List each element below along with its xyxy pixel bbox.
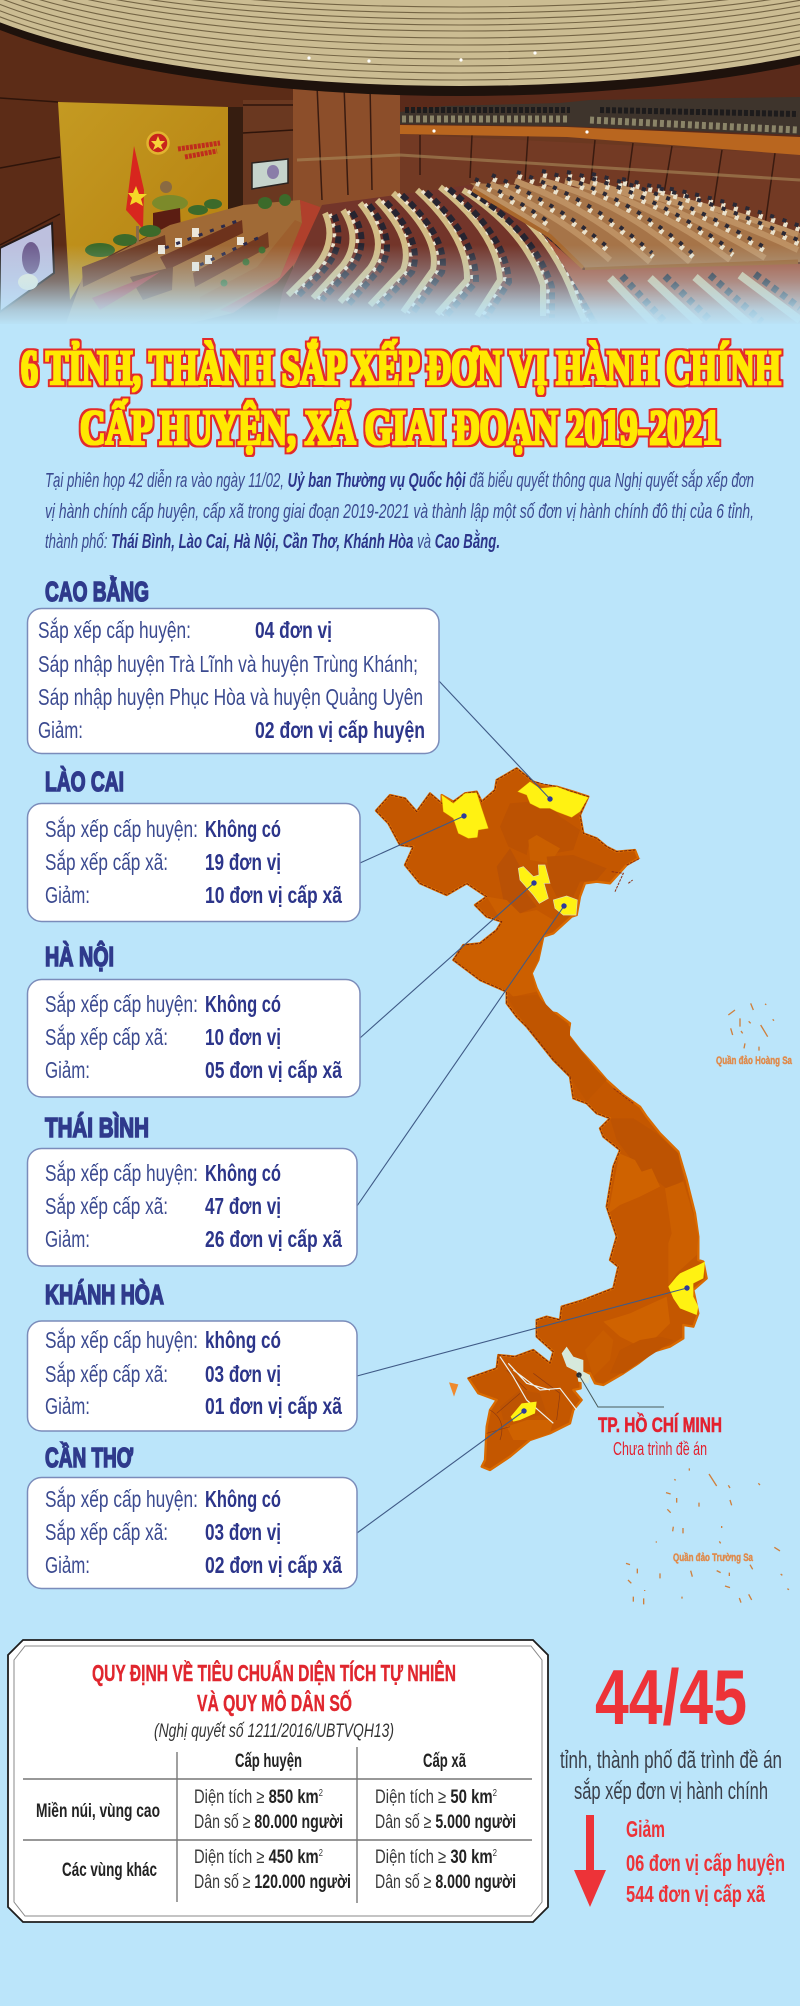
callout: Ho Chi Minh City bbox=[576, 1372, 722, 1459]
panel: Cao Bang: Sắp xếp cấp huyện: bbox=[38, 617, 191, 643]
big number 44/45: 44/45 bbox=[595, 1653, 747, 1741]
callout: Ho Chi Minh City: Chưa trình đề án bbox=[613, 1439, 707, 1459]
row: mountainous regions bbox=[36, 1787, 516, 1833]
map outline bbox=[376, 768, 707, 1470]
yellow province: Thai Binh bbox=[553, 896, 577, 915]
panel: Ha Noi: 05 đơn vị cấp xã bbox=[205, 1057, 342, 1083]
title bbox=[21, 338, 781, 455]
yellow province: Can Tho bbox=[511, 1402, 537, 1422]
panel: Thai Binh bbox=[28, 1112, 357, 1266]
row: other regions: Dân số ≥ 120.000 người bbox=[194, 1872, 351, 1893]
panel: criteria table bbox=[8, 1640, 548, 1922]
map of Vietnam bbox=[376, 768, 793, 1604]
row: mountainous regions: Diện tích ≥ 850 km bbox=[194, 1787, 333, 1808]
yellow province: Cao Bang bbox=[518, 782, 588, 817]
panel: Lao Cai: 10 đơn vị cấp xã bbox=[205, 882, 342, 908]
panel: Ha Noi: Sắp xếp cấp xã: bbox=[45, 1024, 168, 1050]
panel: Can Tho: Giảm: bbox=[45, 1552, 90, 1578]
panel: Can Tho: CẦN THƠ bbox=[45, 1442, 133, 1473]
screens bbox=[0, 159, 288, 312]
panel: Khanh Hoa bbox=[28, 1279, 357, 1431]
ceiling bbox=[0, 0, 800, 96]
panel: Cao Bang bbox=[28, 576, 439, 754]
islands: Hoang Sa bbox=[728, 1003, 774, 1051]
islands: Truong Sa bbox=[626, 1468, 789, 1604]
table heading: QUY ĐỊNH VỀ TIÊU CHUẨN DIỆN TÍCH TỰ NHIÊN bbox=[92, 1659, 456, 1686]
border dashes bbox=[376, 768, 635, 1378]
yellow province: Lao Cai bbox=[442, 793, 488, 838]
panel: Thai Binh: Sắp xếp cấp huyện: bbox=[45, 1160, 198, 1186]
panel: Thai Binh: Không có bbox=[205, 1160, 281, 1186]
panel: Ha Noi: Sắp xếp cấp huyện: bbox=[45, 991, 198, 1017]
panel: Cao Bang: CAO BẰNG bbox=[45, 576, 149, 607]
panel: Thai Binh: THÁI BÌNH bbox=[45, 1112, 149, 1143]
panel: Thai Binh: 47 đơn vị bbox=[205, 1193, 281, 1219]
row: other regions: Diện tích ≥ 30 km bbox=[375, 1847, 504, 1868]
province shading bbox=[453, 790, 698, 1440]
intro paragraph: thành phố: Thái Bình, Lào Cai, Hà Nội, Cần Thơ, Khánh Hòa và Cao Bằng. bbox=[45, 530, 500, 553]
panel: Khanh Hoa: KHÁNH HÒA bbox=[45, 1279, 164, 1310]
header photo: National Assembly hall bbox=[0, 0, 800, 330]
delegate seating: right block bbox=[470, 171, 800, 326]
panel: Can Tho: 02 đơn vị cấp xã bbox=[205, 1552, 342, 1578]
row: mountainous regions: 2 bbox=[319, 1788, 323, 1799]
yellow province: Khanh Hoa bbox=[668, 1262, 705, 1315]
northern islets bbox=[612, 858, 640, 1103]
row: other regions: Diện tích ≥ 450 km bbox=[194, 1847, 333, 1868]
callout: Ho Chi Minh City: TP. HỒ CHÍ MINH bbox=[598, 1413, 722, 1437]
panel: Khanh Hoa: 01 đơn vị cấp xã bbox=[205, 1393, 342, 1419]
Phu Quoc island bbox=[449, 1382, 458, 1397]
reduction text: Giảm bbox=[626, 1816, 665, 1842]
panel: Cao Bang: 04 đơn vị bbox=[255, 617, 332, 643]
panel: Lao Cai: Sắp xếp cấp xã: bbox=[45, 849, 168, 875]
panel: Lao Cai: 19 đơn vị bbox=[205, 849, 281, 875]
table heading bbox=[92, 1659, 456, 1742]
panel: Can Tho: Sắp xếp cấp xã: bbox=[45, 1519, 168, 1545]
yellow stage wall with emblem and flag bbox=[58, 102, 243, 300]
panel: Ha Noi: Giảm: bbox=[45, 1057, 90, 1083]
table heading: (Nghị quyết số 1211/2016/UBTVQH13) bbox=[154, 1721, 394, 1742]
panel: Ha Noi: 10 đơn vị bbox=[205, 1024, 281, 1050]
yellow province: Ha Noi bbox=[518, 865, 550, 903]
presidium desks and floor bbox=[70, 194, 320, 313]
big number caption bbox=[560, 1747, 782, 1805]
panel: Thai Binh: Sắp xếp cấp xã: bbox=[45, 1193, 168, 1219]
panel: Thai Binh: Giảm: bbox=[45, 1226, 90, 1252]
panel: Cao Bang: Sáp nhập huyện Phục Hòa và huyện Quảng Uyên bbox=[38, 684, 423, 710]
table headers bbox=[235, 1751, 466, 1772]
table grid bbox=[23, 1747, 532, 1903]
intro paragraph bbox=[45, 469, 754, 553]
panel: Cao Bang: 02 đơn vị cấp huyện bbox=[255, 717, 425, 743]
delegate seating: centre fan bbox=[275, 185, 594, 326]
panel: Lao Cai bbox=[28, 766, 360, 922]
row: mountainous regions: Dân số ≥ 5.000 người bbox=[375, 1812, 516, 1833]
row: mountainous regions: Diện tích ≥ 50 km bbox=[375, 1787, 504, 1808]
panel: Can Tho: Sắp xếp cấp huyện: bbox=[45, 1486, 198, 1512]
panel: Lao Cai: LÀO CAI bbox=[45, 766, 124, 797]
panel: Can Tho: Không có bbox=[205, 1486, 281, 1512]
panel: Khanh Hoa: Giảm: bbox=[45, 1393, 90, 1419]
row: other regions: 2 bbox=[493, 1848, 497, 1859]
row: mountainous regions: 2 bbox=[493, 1788, 497, 1799]
row: mountainous regions: Dân số ≥ 80.000 người bbox=[194, 1812, 343, 1833]
row: other regions: 2 bbox=[319, 1848, 323, 1859]
panel: Lao Cai: Sắp xếp cấp huyện: bbox=[45, 816, 198, 842]
panel: Lao Cai: Không có bbox=[205, 816, 281, 842]
table headers: Cấp huyện bbox=[235, 1751, 302, 1772]
panel: Can Tho bbox=[28, 1442, 357, 1588]
panel: Cao Bang: Giảm: bbox=[38, 717, 83, 743]
panel: Cao Bang: Sáp nhập huyện Trà Lĩnh và huyện Trùng Khánh; bbox=[38, 651, 418, 677]
panel: Ha Noi bbox=[28, 940, 360, 1097]
panel: Lao Cai: Giảm: bbox=[45, 882, 90, 908]
photo fade to background bbox=[0, 245, 800, 326]
panel: Thai Binh: 26 đơn vị cấp xã bbox=[205, 1226, 342, 1252]
panel: Ha Noi: Không có bbox=[205, 991, 281, 1017]
row: other regions: Các vùng khác bbox=[62, 1860, 157, 1881]
panel: Ha Noi: HÀ NỘI bbox=[45, 940, 114, 972]
row: other regions: Dân số ≥ 8.000 người bbox=[375, 1872, 516, 1893]
panel: Khanh Hoa: không có bbox=[205, 1327, 281, 1353]
row: other regions bbox=[62, 1847, 516, 1893]
mekong rivers bbox=[500, 1357, 577, 1423]
label: Truong Sa: Quần đảo Trường Sa bbox=[673, 1552, 754, 1564]
panel: Khanh Hoa: 03 đơn vị bbox=[205, 1361, 281, 1387]
panel: Khanh Hoa: Sắp xếp cấp xã: bbox=[45, 1361, 168, 1387]
connector lines and dots bbox=[357, 681, 690, 1533]
Ho Chi Minh City bbox=[562, 1347, 590, 1383]
panel: Khanh Hoa: Sắp xếp cấp huyện: bbox=[45, 1327, 198, 1353]
icon: down arrow bbox=[574, 1815, 606, 1907]
panel: Can Tho: 03 đơn vị bbox=[205, 1519, 281, 1545]
row: mountainous regions: Miền núi, vùng cao bbox=[36, 1801, 160, 1822]
reduction text bbox=[626, 1816, 785, 1907]
table headers: Cấp xã bbox=[423, 1751, 466, 1772]
table heading: VÀ QUY MÔ DÂN SỐ bbox=[197, 1689, 352, 1716]
balcony bbox=[400, 97, 800, 155]
